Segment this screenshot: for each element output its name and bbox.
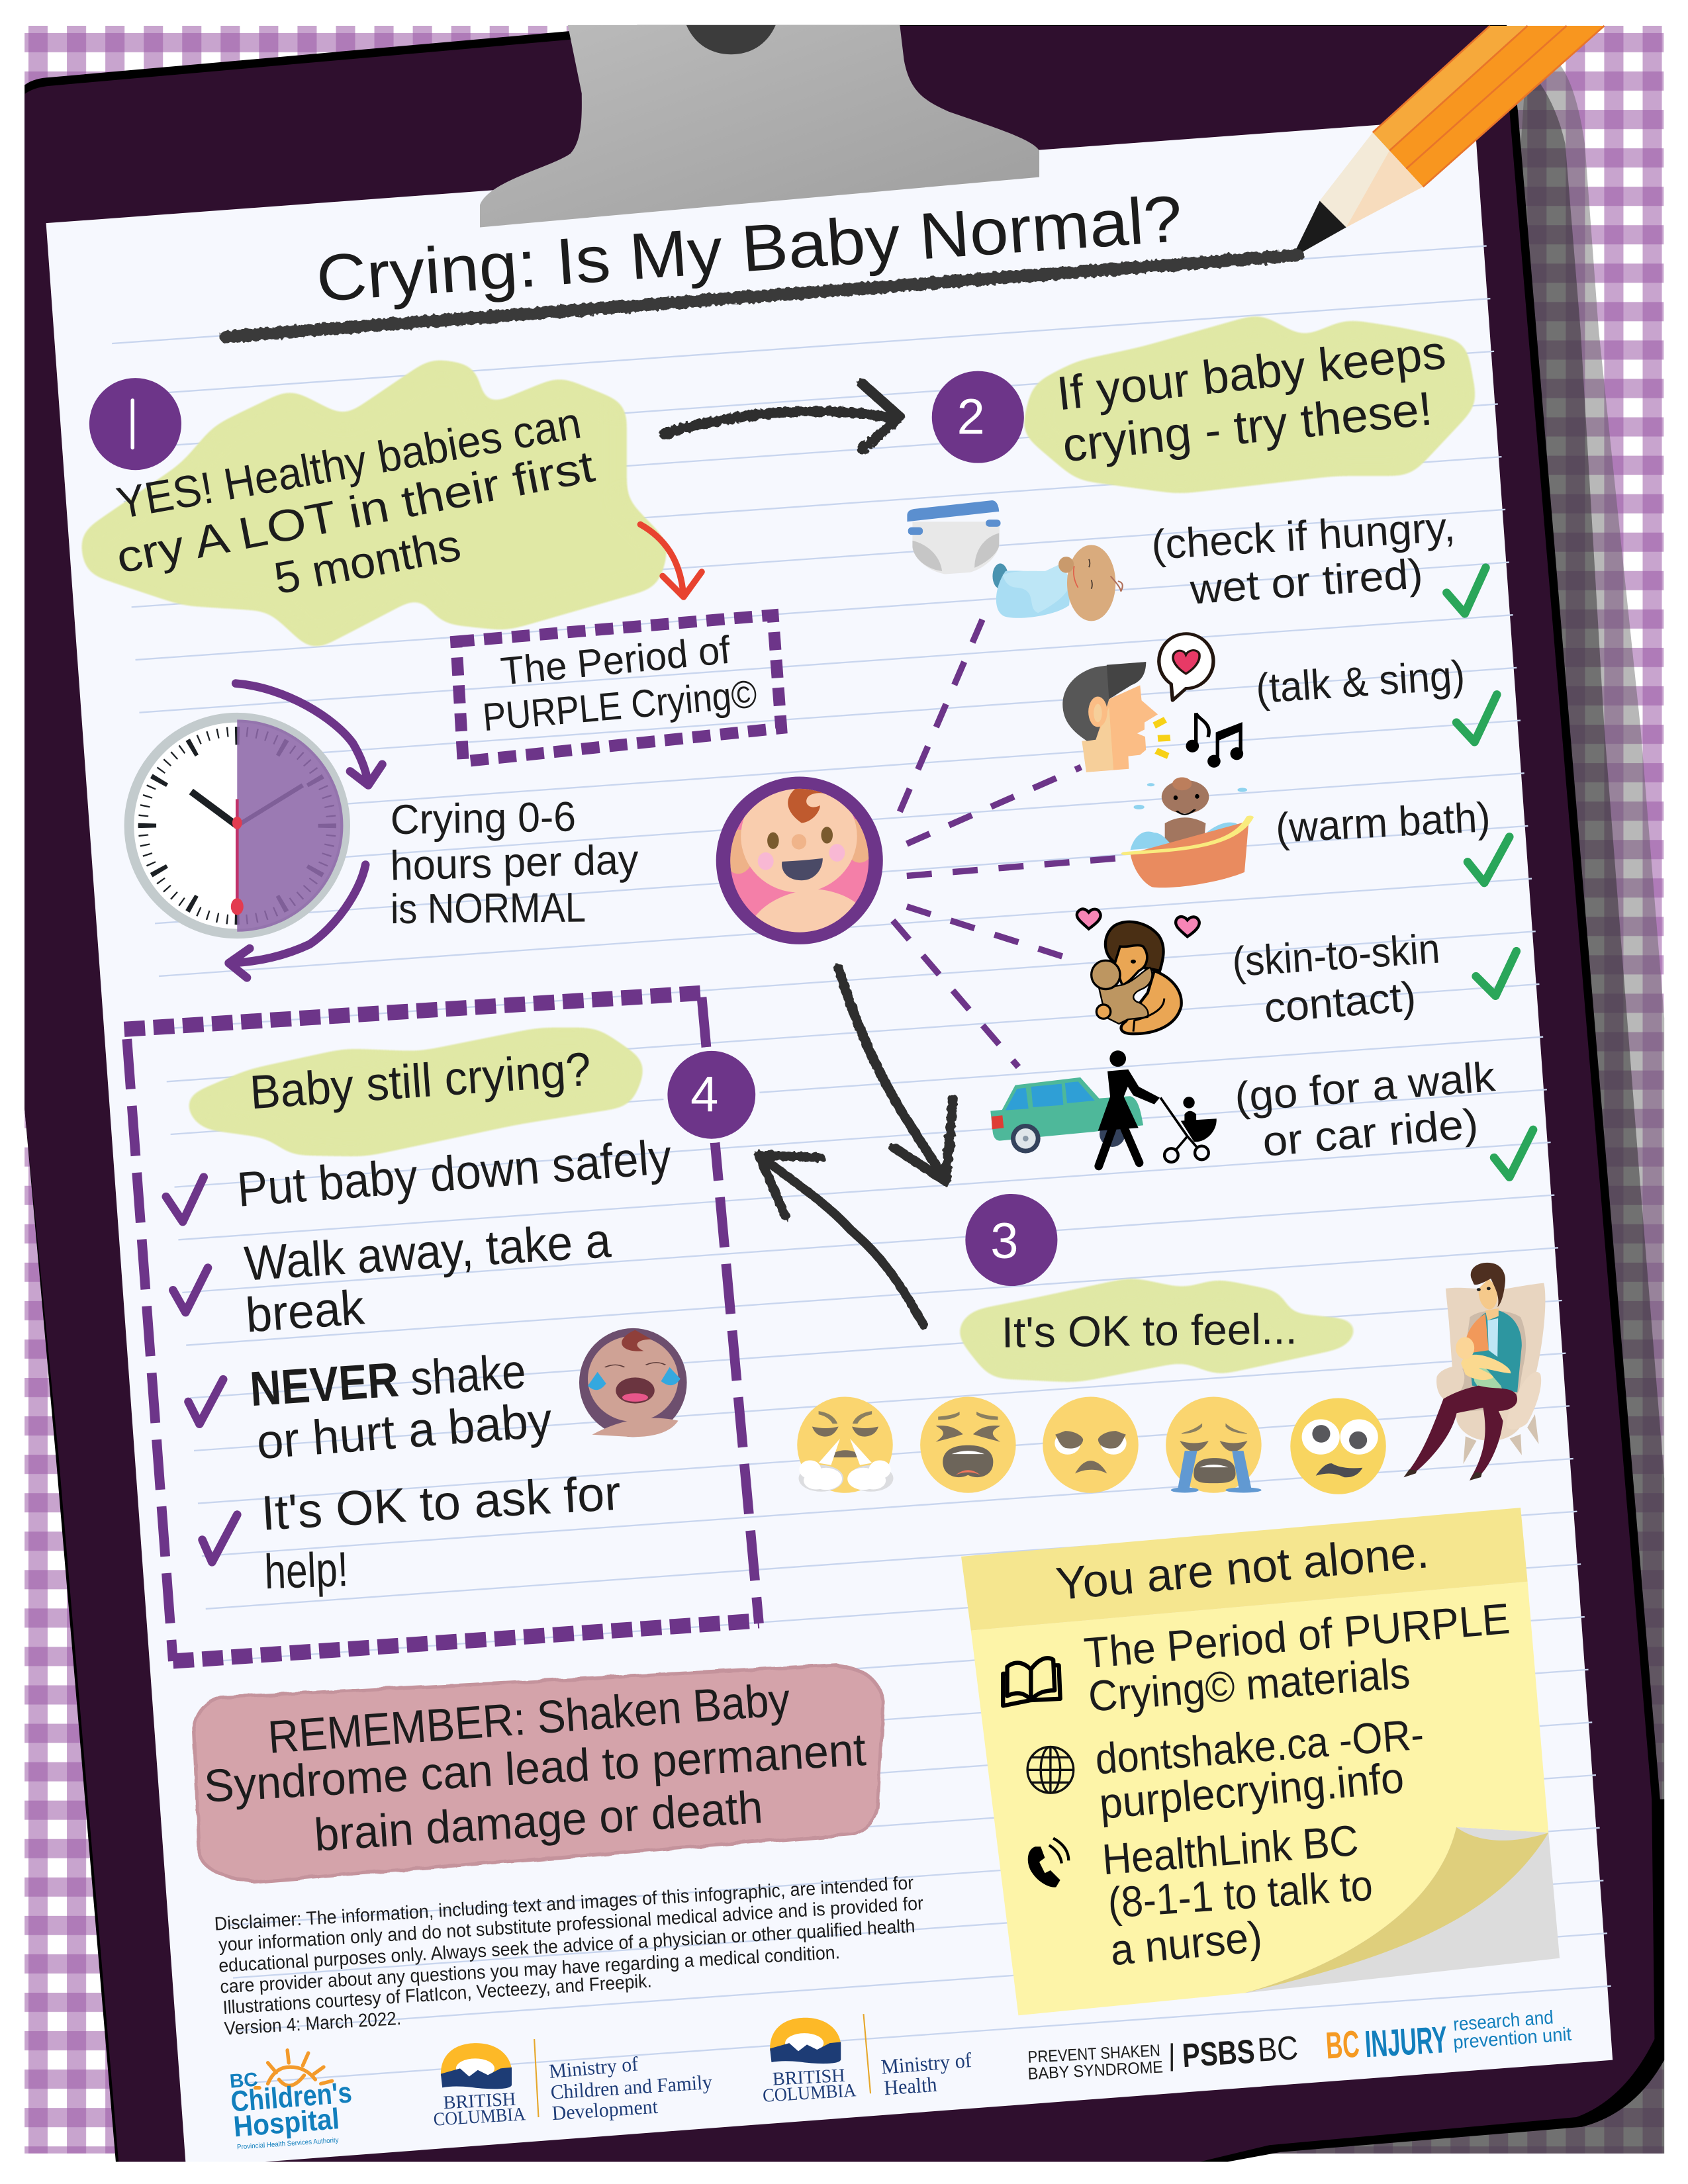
panel: Period of PURPLE Crying box: The Period of xyxy=(499,628,733,694)
arrow: step 1 to step 2 xyxy=(664,384,900,449)
text: crying hours per day: hours per day xyxy=(390,837,639,889)
text: disclaimer: Illustrations courtesy of FlatIcon, Vecteezy, and Freepik. xyxy=(222,1970,652,2019)
icons: purple check marks xyxy=(166,1177,237,1562)
text: disclaimer: Version 4: March 2022. xyxy=(224,2008,402,2040)
step 4 list text: break xyxy=(244,1279,366,1343)
icon: laughing baby portrait xyxy=(716,777,883,944)
text: step 2 suggestions: wet or tired) xyxy=(1188,551,1425,614)
green highlight blob 2 xyxy=(1023,315,1476,492)
logo: BC Children's Hospital: Hospital xyxy=(232,2103,341,2144)
BC emblem xyxy=(770,2018,841,2064)
callout: remember warning: Syndrome can lead to permanent xyxy=(203,1723,867,1812)
number badge 2: 2 xyxy=(957,388,985,445)
text: crying hours per day xyxy=(390,794,639,933)
panel: Period of PURPLE Crying box xyxy=(456,615,781,762)
step 1 text: YES! Healthy babies can xyxy=(113,398,585,529)
emoji: frustrated xyxy=(797,1396,893,1493)
step 4 list text xyxy=(235,1129,673,1599)
logo: BC Ministry of Children and Family Development: BRITISH xyxy=(443,2089,516,2113)
callout: remember warning: brain damage or death xyxy=(312,1781,764,1861)
curled corner xyxy=(1244,1827,1548,1993)
number badge 1 xyxy=(89,378,181,470)
dashed connector lines xyxy=(893,614,1123,1067)
step 1 text: cry A LOT in their first xyxy=(113,441,598,583)
icon: globe xyxy=(1027,1747,1074,1793)
text: disclaimer xyxy=(214,1872,924,2040)
callout: remember warning xyxy=(194,1665,883,1882)
logo: BC Ministry of Health: Health xyxy=(883,2073,938,2099)
green highlight blob 4 xyxy=(183,1029,646,1155)
logo: BC Children's Hospital xyxy=(229,2050,353,2152)
number badge 4 xyxy=(665,1049,757,1141)
sticky note heading: You are not alone. xyxy=(1054,1525,1430,1610)
text: disclaimer: care provider about any questions you may have regarding a medical condition. xyxy=(220,1942,841,1997)
logo: BC Ministry of Children and Family Development: Children and Family xyxy=(550,2071,714,2104)
icon: parent walking with stroller xyxy=(1098,1050,1217,1166)
icon: man talking and singing xyxy=(1062,662,1170,772)
text: disclaimer: educational purposes only. Always seek the advice of a physician or other qualified health xyxy=(218,1915,915,1977)
logo: BC Injury research and prevention unit: research and xyxy=(1452,2007,1554,2035)
step 4 list text: Put baby down safely xyxy=(235,1129,673,1217)
sticky note text xyxy=(1082,1594,1511,1974)
logo: BC Ministry of Children and Family Development xyxy=(433,2039,714,2130)
metal clip xyxy=(480,25,1039,228)
green highlight blob 1 xyxy=(81,360,668,650)
step 4 list text: NEVER shake xyxy=(248,1343,528,1416)
arrow: down to step 3 xyxy=(839,968,953,1181)
sticky note text: dontshake.ca -OR- xyxy=(1094,1710,1425,1784)
logo: BC Ministry of Health xyxy=(762,2014,972,2107)
step 4 list text: It's OK to ask for xyxy=(259,1465,622,1541)
emoji: angry xyxy=(1043,1396,1139,1493)
text: disclaimer: your information only and do not substitute professional medical advice and is provided for xyxy=(218,1893,924,1956)
ruled notebook lines xyxy=(112,245,1611,2084)
number badge 3 xyxy=(965,1194,1057,1286)
sticky note text: (8-1-1 to talk to xyxy=(1106,1861,1374,1927)
logo: PSBSBC: BC xyxy=(1256,2028,1299,2069)
logo: BC Children's Hospital: BC xyxy=(229,2069,259,2093)
step 3 text: It's OK to feel... xyxy=(1001,1304,1297,1357)
sticky note header xyxy=(961,1508,1528,1631)
title: Crying: Is My Baby Normal? xyxy=(314,181,1185,315)
logo: BC Ministry of Health: COLUMBIA xyxy=(762,2080,857,2107)
logo: BC Injury research and prevention unit: prevention unit xyxy=(1452,2024,1572,2054)
text: crying hours per day: Crying 0-6 xyxy=(390,794,577,843)
icon: baby in warm bath xyxy=(1125,778,1250,887)
icon: diaper xyxy=(907,500,1001,574)
dashed border xyxy=(124,993,759,1661)
icon: crying baby xyxy=(579,1328,687,1437)
chart: half-shaded clock xyxy=(129,717,346,934)
text: crying hours per day: is NORMAL xyxy=(391,885,586,933)
step 2 text xyxy=(1055,326,1448,472)
logo: BC Injury research and prevention unit: INJURY xyxy=(1364,2019,1448,2066)
logo: BC Injury research and prevention unit: BC xyxy=(1325,2023,1360,2068)
pencil xyxy=(1291,26,1605,258)
number badge 3: 3 xyxy=(990,1213,1018,1269)
illustration: parent holding baby in armchair xyxy=(1403,1263,1545,1480)
logo: PSBSBC: PREVENT SHAKEN xyxy=(1027,2041,1160,2067)
step 2 text: If your baby keeps xyxy=(1055,326,1448,420)
panel: step 1 xyxy=(81,360,668,650)
step 1 text xyxy=(113,398,598,604)
logo: BC Injury research and prevention unit xyxy=(1325,2007,1572,2068)
panel: sticky note resources xyxy=(961,1508,1560,2015)
icon: sleeping baby xyxy=(992,545,1123,621)
logo: BC Ministry of Children and Family Development: Development xyxy=(551,2095,659,2124)
BC emblem xyxy=(441,2043,512,2089)
icon: green car xyxy=(990,1077,1143,1154)
icon: music notes xyxy=(1186,713,1243,768)
arrow: clock clockwise bottom xyxy=(229,865,365,978)
step 1 text: 5 months xyxy=(270,520,465,604)
text: step 2 suggestions: (warm bath) xyxy=(1274,794,1491,852)
callout: remember warning: REMEMBER: Shaken Baby xyxy=(266,1673,792,1763)
icons: green check marks xyxy=(1446,568,1533,1177)
arrow: red down to PURPLE box xyxy=(640,524,702,597)
emoji: crying xyxy=(1166,1396,1262,1493)
arrow: step 3 to step 4 xyxy=(759,1155,923,1325)
sticky note text: The Period of PURPLE xyxy=(1082,1594,1511,1677)
step 4 list text: or hurt a baby xyxy=(255,1392,554,1469)
text: step 2 suggestions xyxy=(1150,504,1497,1165)
icon: heart speech bubble xyxy=(1159,634,1213,700)
number badge 4: 4 xyxy=(690,1067,718,1123)
panel: step 3 xyxy=(956,1194,1363,1381)
emoji: wailing xyxy=(920,1396,1016,1493)
step 4 list text: Walk away, take a xyxy=(243,1212,613,1291)
text: step 2 suggestions: contact) xyxy=(1262,974,1418,1032)
emoji row: feelings xyxy=(797,1396,1386,1494)
logo: BC Ministry of Children and Family Development: Ministry of xyxy=(548,2052,639,2083)
step 4 list text: help! xyxy=(263,1541,349,1599)
icon: book xyxy=(1003,1658,1060,1706)
panel: step 2 heading xyxy=(932,315,1476,492)
logo: BC Ministry of Health: Ministry of xyxy=(880,2048,972,2079)
text: step 2 suggestions: or car ride) xyxy=(1260,1101,1480,1165)
text: step 2 suggestions: (skin-to-skin xyxy=(1231,926,1441,985)
peeled corner shadow xyxy=(1244,1827,1560,1993)
panel: step 4 Baby still crying xyxy=(124,993,759,1661)
emoji: anxious xyxy=(1290,1398,1386,1494)
step 2 text: crying - try these! xyxy=(1060,382,1434,472)
step 4 heading: Baby still crying? xyxy=(248,1043,593,1119)
logo: PSBSBC: PSBS xyxy=(1181,2032,1256,2074)
logo: BC Children's Hospital: Children's xyxy=(230,2076,353,2118)
logo: BC Ministry of Health: BRITISH xyxy=(772,2066,845,2090)
sticky note text: a nurse) xyxy=(1108,1912,1264,1974)
logo: PSBSBC xyxy=(1027,2028,1299,2083)
title underline xyxy=(226,255,1297,337)
icon: skin-to-skin parent and baby xyxy=(1077,909,1199,1034)
number badge 2 xyxy=(932,371,1024,463)
panel: Period of PURPLE Crying box: PURPLE Crying© xyxy=(481,672,759,739)
sticky note text: Crying© materials xyxy=(1087,1649,1411,1721)
sticky note text: HealthLink BC xyxy=(1100,1816,1360,1884)
text: step 2 suggestions: (check if hungry, xyxy=(1150,504,1456,569)
logo: BC Ministry of Children and Family Development: COLUMBIA xyxy=(433,2104,526,2130)
sticky note body xyxy=(971,1582,1548,2015)
green highlight blob 3 xyxy=(956,1279,1363,1381)
logo: BC Children's Hospital: Provincial Health Services Authority xyxy=(237,2136,340,2152)
text: disclaimer: Disclaimer: The information, including text and images of this infographic, are intended for xyxy=(214,1872,914,1935)
text: step 2 suggestions: (go for a walk xyxy=(1233,1054,1497,1121)
logo: PSBSBC: BABY SYNDROME xyxy=(1027,2058,1164,2083)
arrow: clock clockwise top xyxy=(236,684,382,785)
sticky note text: purplecrying.info xyxy=(1098,1753,1406,1828)
clipboard shadow xyxy=(1228,42,1664,2154)
text: step 2 suggestions: (talk & sing) xyxy=(1254,652,1466,712)
icon: phone xyxy=(1028,1839,1068,1888)
